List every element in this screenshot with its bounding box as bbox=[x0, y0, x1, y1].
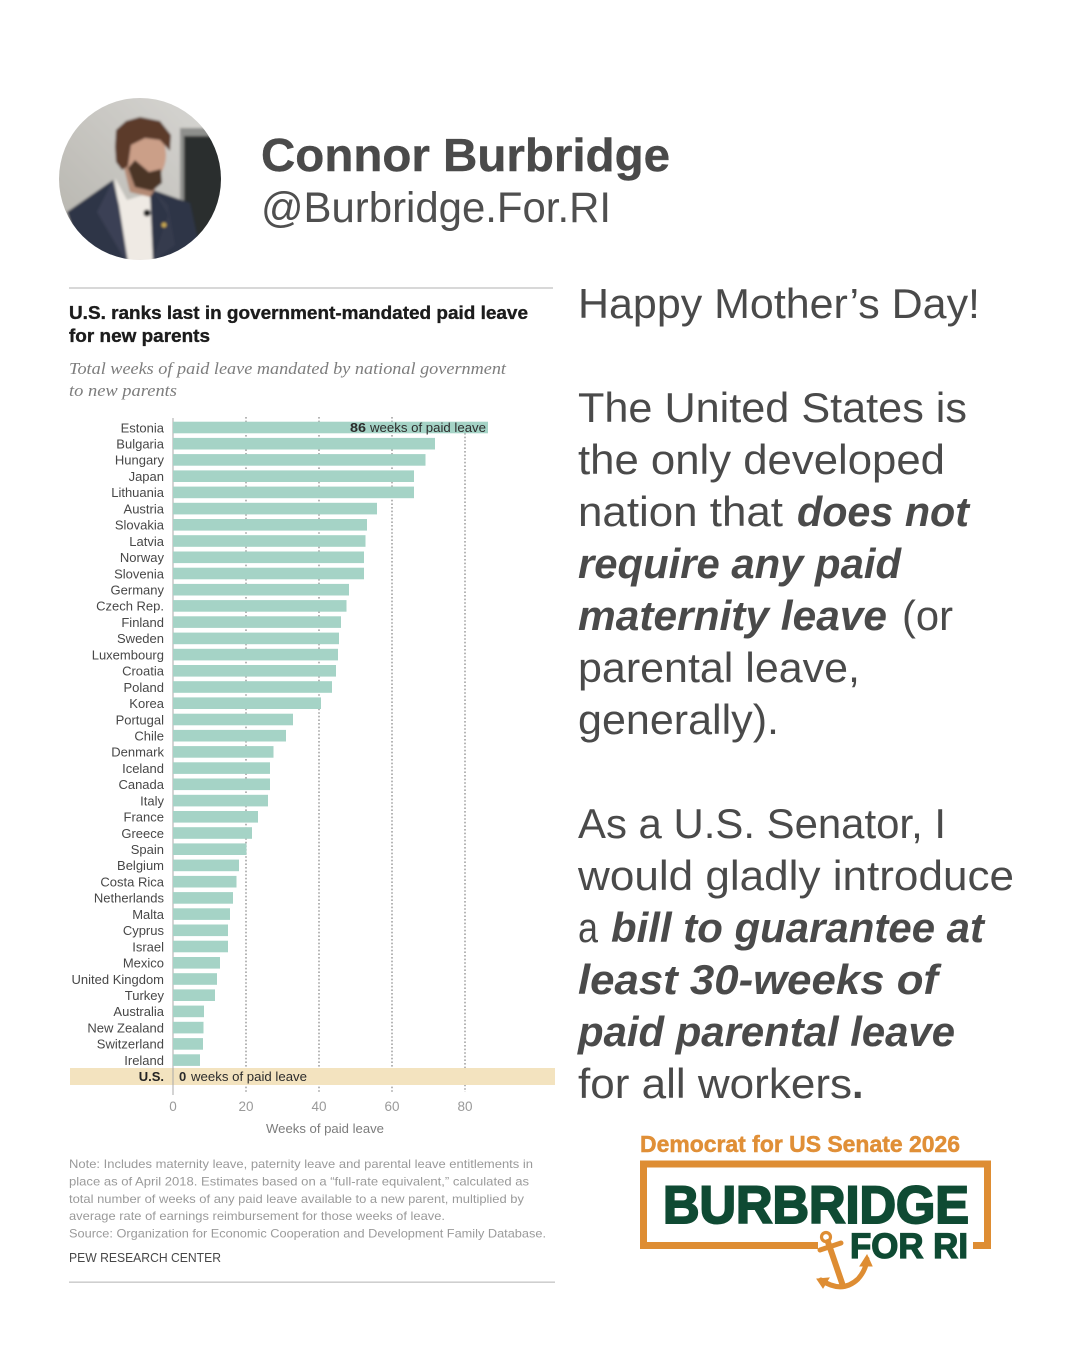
text block: paragraph on Senate bill: bill to guarantee at bbox=[611, 904, 986, 951]
chart subtitle bbox=[69, 359, 506, 400]
text block: paragraph on Senate bill: least 30-weeks of bbox=[578, 956, 942, 1003]
chart title bbox=[69, 303, 528, 346]
chart note and source bbox=[69, 1157, 546, 1240]
panel: Pew chart bbox=[69, 287, 555, 1283]
x axis title: Weeks of paid leave bbox=[266, 1121, 384, 1136]
text block: paragraph on Senate bill: As a U.S. Senator, I bbox=[578, 800, 946, 847]
country labels: France bbox=[124, 810, 164, 825]
country labels: Portugal bbox=[116, 712, 164, 727]
U.S. value label: weeks of paid leave bbox=[190, 1069, 307, 1084]
country labels: Bulgaria bbox=[116, 436, 165, 452]
country labels: Cyprus bbox=[123, 923, 164, 938]
country labels: Norway bbox=[120, 550, 164, 565]
country labels: Finland bbox=[121, 615, 164, 630]
text block: paragraph on United States: nation that bbox=[578, 488, 783, 535]
country labels: Korea bbox=[129, 696, 165, 711]
country labels: Hungary bbox=[115, 453, 164, 468]
x axis ticks: 80 bbox=[457, 1099, 473, 1114]
text block: paragraph on United States: The United States is bbox=[578, 384, 967, 431]
chart note and source: total number of weeks of any paid leave available to a new parent, multiplied by bbox=[69, 1192, 524, 1206]
text block: paragraph on United States: generally). bbox=[578, 696, 779, 743]
text block: paragraph on United States: (or bbox=[902, 592, 953, 639]
country labels: Iceland bbox=[122, 761, 164, 776]
text block: paragraph on United States: parental leave, bbox=[578, 644, 860, 691]
country labels: Canada bbox=[118, 777, 165, 792]
country labels: Croatia bbox=[122, 664, 165, 679]
x axis ticks: 40 bbox=[311, 1099, 327, 1114]
text block: paragraph on Senate bill: paid parental leave bbox=[577, 1008, 955, 1055]
country labels: Austria bbox=[124, 501, 165, 516]
country labels: Japan bbox=[129, 469, 164, 484]
icon: anchor bbox=[817, 1232, 872, 1288]
Pew Research Center credit: PEW RESEARCH CENTER bbox=[69, 1250, 221, 1265]
text block: paragraph on United States: does not bbox=[797, 488, 971, 535]
chart subtitle: Total weeks of paid leave mandated by national government bbox=[69, 359, 506, 378]
chart note and source: Note: Includes maternity leave, paternity leave and parental leave entitlements in bbox=[69, 1157, 533, 1171]
country labels: Slovenia bbox=[114, 566, 165, 581]
country labels: Luxembourg bbox=[92, 647, 164, 662]
Estonia value label: 86 bbox=[350, 420, 366, 435]
country labels: United Kingdom bbox=[72, 972, 164, 987]
country labels: New Zealand bbox=[87, 1020, 164, 1035]
logo for RI: FOR RI bbox=[850, 1227, 968, 1266]
country labels: Chile bbox=[134, 728, 164, 744]
country labels: Spain bbox=[131, 842, 164, 857]
country labels: Germany bbox=[111, 582, 164, 598]
country labels: Switzerland bbox=[97, 1037, 164, 1052]
country labels: Poland bbox=[124, 680, 164, 695]
campaign logo bbox=[640, 1131, 988, 1288]
logo frame bbox=[644, 1164, 988, 1246]
country labels: Turkey bbox=[125, 988, 164, 1003]
x axis ticks: 20 bbox=[238, 1099, 254, 1114]
country labels: U.S. bbox=[139, 1069, 164, 1084]
chart note and source: average rate of earnings reimbursement for those weeks of leave. bbox=[69, 1209, 445, 1223]
text block: greeting: Happy Mother’s Day! bbox=[578, 280, 980, 327]
country labels: Czech Rep. bbox=[96, 599, 164, 614]
country labels: Mexico bbox=[123, 956, 164, 971]
text block: paragraph on Senate bill: would gladly introduce bbox=[577, 852, 1014, 899]
U.S. highlight band bbox=[70, 1068, 555, 1085]
text block: paragraph on Senate bill bbox=[577, 800, 1014, 1107]
bar chart bbox=[70, 417, 555, 1136]
country labels: Estonia bbox=[121, 420, 165, 435]
text block: paragraph on United States: the only developed bbox=[578, 436, 945, 483]
text block: paragraph on United States: maternity leave bbox=[578, 592, 887, 639]
country labels: Belgium bbox=[117, 858, 164, 873]
chart title: U.S. ranks last in government-mandated paid leave bbox=[69, 303, 528, 323]
country labels: Italy bbox=[140, 793, 164, 808]
chart title: for new parents bbox=[69, 326, 210, 346]
chart note and source: Source: Organization for Economic Cooperation and Development Family Database. bbox=[69, 1226, 546, 1240]
country labels: Netherlands bbox=[94, 891, 164, 906]
country labels bbox=[72, 420, 165, 1084]
text block: paragraph on United States bbox=[578, 384, 971, 743]
x axis ticks: 0 bbox=[169, 1099, 177, 1114]
country labels: Ireland bbox=[124, 1053, 164, 1068]
U.S. value label: 0 bbox=[179, 1069, 186, 1084]
logo tagline: Democrat for US Senate 2026 bbox=[640, 1131, 960, 1157]
text block: paragraph on United States: require any paid bbox=[578, 540, 903, 587]
chart note and source: place as of April 2018. Estimates based on a “full-rate equivalent,” calculated as bbox=[69, 1174, 529, 1188]
profile name: Connor Burbridge bbox=[261, 129, 670, 181]
chart subtitle: to new parents bbox=[69, 381, 177, 400]
country labels: Costa Rica bbox=[100, 874, 165, 890]
country labels: Israel bbox=[132, 939, 164, 954]
logo name: BURBRIDGE bbox=[663, 1176, 969, 1235]
country labels: Denmark bbox=[111, 745, 164, 760]
text block: paragraph on Senate bill: a bbox=[578, 904, 599, 951]
country labels: Greece bbox=[121, 826, 164, 841]
profile photo bbox=[59, 98, 221, 260]
country labels: Sweden bbox=[117, 631, 164, 646]
Estonia value label: weeks of paid leave bbox=[369, 420, 486, 435]
country labels: Latvia bbox=[129, 534, 165, 549]
x axis ticks: 60 bbox=[384, 1099, 400, 1114]
country labels: Australia bbox=[113, 1004, 165, 1019]
text block: paragraph on Senate bill: . bbox=[852, 1060, 864, 1107]
text block: paragraph on Senate bill: for all workers bbox=[578, 1060, 852, 1107]
profile handle: @Burbridge.For.RI bbox=[261, 184, 611, 232]
bars bbox=[173, 422, 488, 1066]
country labels: Lithuania bbox=[111, 485, 165, 500]
country labels: Malta bbox=[132, 907, 165, 922]
x axis ticks bbox=[169, 1099, 473, 1114]
country labels: Slovakia bbox=[115, 518, 165, 533]
